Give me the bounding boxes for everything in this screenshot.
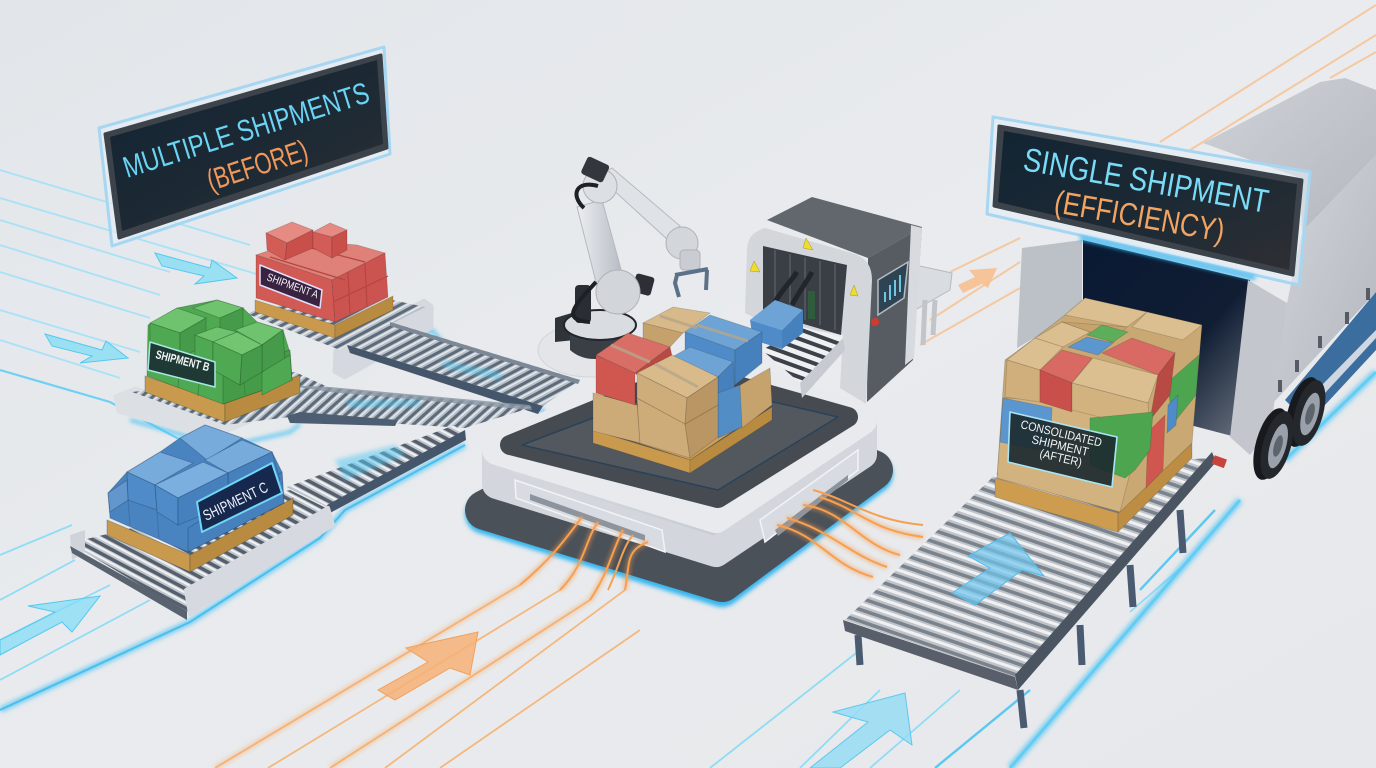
consolidated pallet on platform [593,307,772,473]
blue box back [180,425,242,460]
conveyor: shipment B line [115,372,533,447]
scanner opening [763,246,847,335]
wood pallet A [255,296,393,338]
scanner front [745,228,872,404]
back tan box [643,307,710,333]
label: shipment C: SHIPMENT C [200,479,271,525]
silver top [497,360,862,518]
robot motor [575,285,591,323]
red stack A [256,240,385,280]
robot control box [555,312,575,342]
sign text line 1: SINGLE SHIPMENT [1021,140,1271,220]
top red box 2 [313,223,347,237]
robot base disc [538,323,642,377]
sign text line 2: (BEFORE) [203,134,312,198]
small green box [1087,325,1128,342]
green box front [213,332,262,355]
shipment A pallet [255,222,393,338]
blue flow lines: bottom right [710,372,1376,768]
front wheel [1246,404,1300,484]
robot elbow [583,169,617,203]
arrow: shipment A flow [155,253,237,284]
scanner curtain [775,250,835,330]
slot left [515,480,665,552]
conveyor: shipment C line [70,425,466,620]
blue box top right [205,440,272,473]
label: shipment A: SHIPMENT A [265,272,320,301]
box tape [611,316,748,387]
arrow: shipment B flow [45,334,128,363]
arrow: blue bottom right [810,693,912,768]
wood pallet B [145,375,300,422]
consolidated shipment pallet [995,298,1202,532]
mid blue box [672,347,733,377]
right door [1230,280,1287,455]
label: shipment B: SHIPMENT B [154,347,211,374]
robot wrist [666,227,700,270]
warning icons [750,238,858,296]
orange flow lines: top right [920,5,1376,345]
silver side [497,360,862,552]
conveyor: shipment A line [245,290,580,414]
front tan box [1072,358,1158,403]
shipment B pallet [145,300,300,422]
orange wires from platform [520,490,923,600]
x-ray scanner machine [745,197,952,404]
blue flow lines: upper left [0,170,260,445]
glow arrows on conveyors [335,360,502,480]
conveyor end hardware [1212,455,1227,468]
robot cable [573,185,598,322]
arrow: blue output conveyor [952,533,1044,605]
truck [1017,78,1376,484]
orange flow lines: bottom centre [215,585,640,768]
label: consolidated shipment: CONSOLIDATED [1019,417,1104,450]
scanner side [867,227,922,402]
blue flow lines: lower left [0,445,465,710]
scanner rear conveyor [915,265,952,345]
robot shoulder joint [596,270,640,314]
robot pedestal [570,325,630,359]
output conveyor [843,452,1227,728]
back boxes [1065,298,1147,327]
big red box [1102,338,1175,375]
tie-downs [1280,288,1368,392]
large blue box [685,315,762,350]
lower blue box [718,385,742,438]
arrow: shipment C flow [0,596,100,655]
upper tan box [637,355,718,398]
scanner stop button [871,318,879,326]
arrow: orange scanner flow [958,268,997,293]
green box back [193,300,243,318]
green box right [235,322,283,345]
blue stack C [108,425,284,552]
conveyor legs [858,510,1183,728]
shipment C pallet [107,425,293,572]
small blue box [1068,337,1113,355]
red box [596,333,670,373]
top red box 1 [266,222,313,243]
blue box on scanner conveyor [750,300,803,349]
scanner conveyor [762,327,843,383]
blue box centre [155,462,228,498]
trailer side [1273,155,1376,403]
red box [1040,350,1092,383]
sign: multiple shipments (before) [99,47,390,246]
center turntable platform [485,360,873,587]
label: consolidated shipment [1008,412,1117,487]
lower tan boxes [593,393,640,443]
sign text line 1: MULTIPLE SHIPMENTS [119,77,373,185]
stack silhouette [997,298,1202,512]
dark top inset [510,372,848,498]
tan left box [1007,338,1063,370]
robot upper arm [598,168,680,240]
wood pallet [995,443,1192,532]
base slab glow [485,405,873,587]
label: consolidated shipment: (AFTER) [1038,446,1083,470]
cargo interior [1083,240,1250,436]
label: consolidated shipment: SHIPMENT [1030,432,1091,459]
wood pallet [593,395,772,473]
stack left face [997,398,1148,512]
rear wheel [1279,373,1332,451]
conveyor rollers [845,458,1212,677]
label: shipment B [148,342,215,387]
sign text line 2: (EFFICIENCY) [1052,183,1227,249]
slot right [760,450,858,542]
lower right tan box [735,368,772,428]
blue box left [127,452,193,485]
left door [1017,240,1082,348]
green box [1090,412,1153,478]
base slab [485,400,873,582]
green box back left [150,308,206,333]
right coloured boxes [1168,355,1199,425]
scanner top [767,197,922,258]
scanner screen [878,262,908,315]
trailer roof [1203,78,1376,232]
green stack B [147,300,292,404]
wood pallet C [107,498,293,572]
robot gripper [675,269,708,297]
blue row [1000,398,1052,452]
robot lower arm [577,200,622,282]
robot arm [538,156,708,377]
conveyor front rail [843,620,1018,690]
chassis [1285,292,1376,415]
arrow: orange centre flow [378,632,478,700]
conveyor side rail [1015,452,1216,690]
sign: single shipment (efficiency) [987,117,1310,285]
